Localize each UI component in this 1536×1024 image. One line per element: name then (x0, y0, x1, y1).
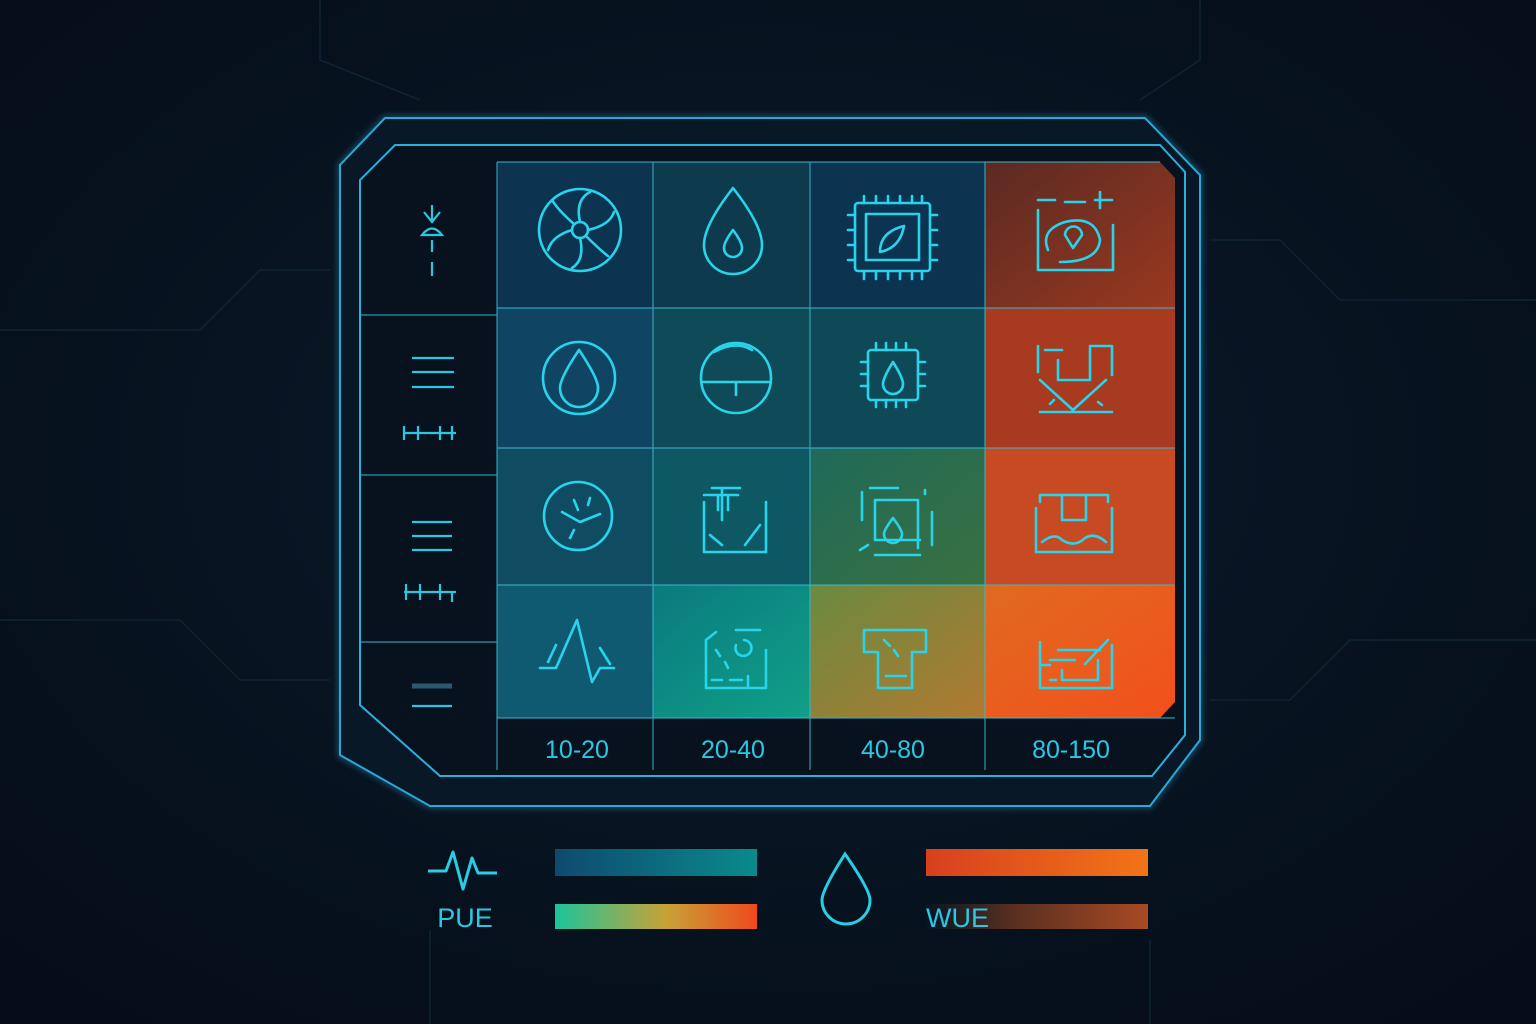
icon: pulse (428, 852, 497, 889)
row icons sidebar (404, 205, 456, 706)
r2 (543, 342, 615, 414)
heatmap grid (360, 162, 1175, 770)
icon: water drop (822, 854, 870, 924)
outer frame (340, 118, 1200, 806)
column labels: 10-20 (545, 736, 609, 764)
column labels: 40-80 (861, 736, 925, 764)
cell icons (539, 188, 1113, 688)
r3 (544, 482, 612, 550)
r4 (540, 620, 614, 682)
legend (428, 849, 1148, 933)
column labels (545, 736, 1110, 764)
column labels: 20-40 (701, 736, 765, 764)
column labels: 80-150 (1032, 736, 1110, 764)
r1 (539, 189, 621, 271)
legend: PUE (437, 903, 493, 933)
legend: WUE (926, 903, 989, 933)
